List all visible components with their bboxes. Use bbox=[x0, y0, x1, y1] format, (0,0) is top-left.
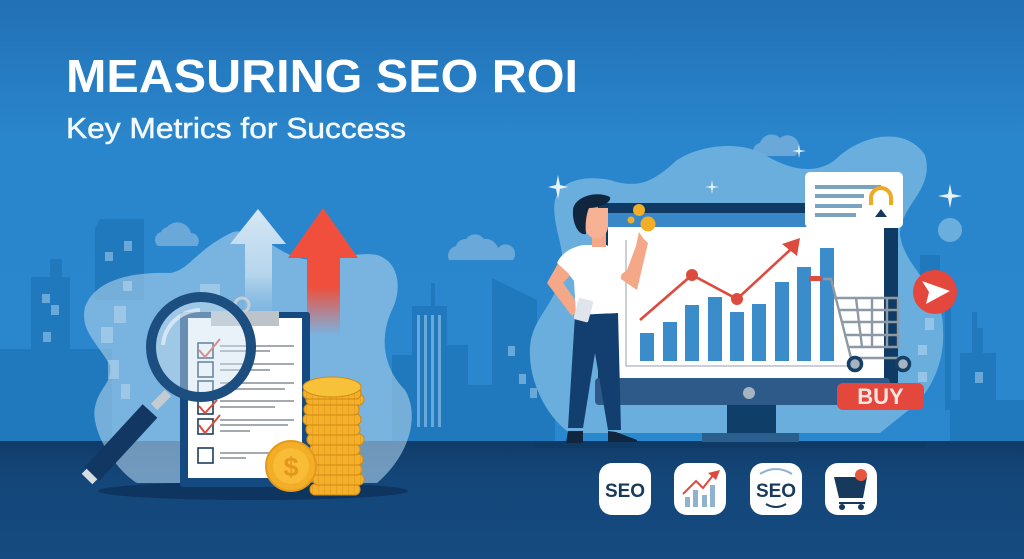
coin: $ bbox=[283, 452, 299, 482]
shirt bbox=[557, 245, 625, 315]
red arrow bbox=[288, 208, 358, 335]
icon: SEO bbox=[599, 463, 651, 515]
clouds bbox=[155, 134, 799, 260]
subtitle: Key Metrics for Success bbox=[66, 113, 406, 145]
cart bbox=[809, 276, 910, 370]
icon: SEO circular bbox=[750, 463, 802, 515]
blob right windows bbox=[918, 318, 934, 382]
hair bbox=[573, 194, 610, 234]
buy button bbox=[837, 383, 924, 410]
phone bbox=[573, 298, 594, 323]
shadow bbox=[98, 482, 408, 500]
floating coins bbox=[628, 204, 656, 232]
checklist boxes bbox=[198, 343, 213, 463]
stars bbox=[548, 144, 962, 208]
buy button: BUY bbox=[857, 384, 904, 409]
pants bbox=[568, 313, 621, 430]
bar chart bbox=[626, 240, 850, 366]
coin bbox=[266, 441, 316, 491]
ground bbox=[0, 441, 1024, 559]
blob right bbox=[530, 136, 943, 433]
city skyline bbox=[0, 219, 1024, 441]
circle deco bbox=[938, 218, 962, 242]
play button bbox=[913, 270, 957, 314]
magnifying glass bbox=[87, 297, 251, 479]
floor line bbox=[535, 442, 925, 448]
trend arrow bbox=[640, 238, 800, 320]
icon: SEO circular: SEO bbox=[756, 481, 796, 502]
right arm bbox=[618, 232, 648, 290]
check marks bbox=[199, 339, 220, 433]
blob left bbox=[84, 231, 412, 483]
icon: cart bbox=[825, 463, 877, 515]
icon row bbox=[599, 463, 877, 515]
blob windows bbox=[101, 281, 220, 399]
icon: growth chart bbox=[674, 463, 726, 515]
building windows bbox=[42, 241, 983, 427]
illustration: analyst at monitor bbox=[530, 136, 962, 448]
coin stack bbox=[303, 377, 364, 495]
left arm bbox=[547, 260, 581, 316]
card bbox=[805, 172, 903, 228]
shoes bbox=[566, 431, 637, 443]
illustration: checklist and growth bbox=[84, 208, 412, 500]
person bbox=[547, 194, 648, 443]
monitor bbox=[595, 203, 898, 442]
neck and face bbox=[592, 232, 606, 247]
title: MEASURING SEO ROI bbox=[66, 50, 578, 102]
clipboard bbox=[180, 298, 310, 487]
white arrow bbox=[230, 209, 286, 320]
checklist lines bbox=[220, 346, 294, 458]
icon: SEO: SEO bbox=[605, 481, 645, 502]
